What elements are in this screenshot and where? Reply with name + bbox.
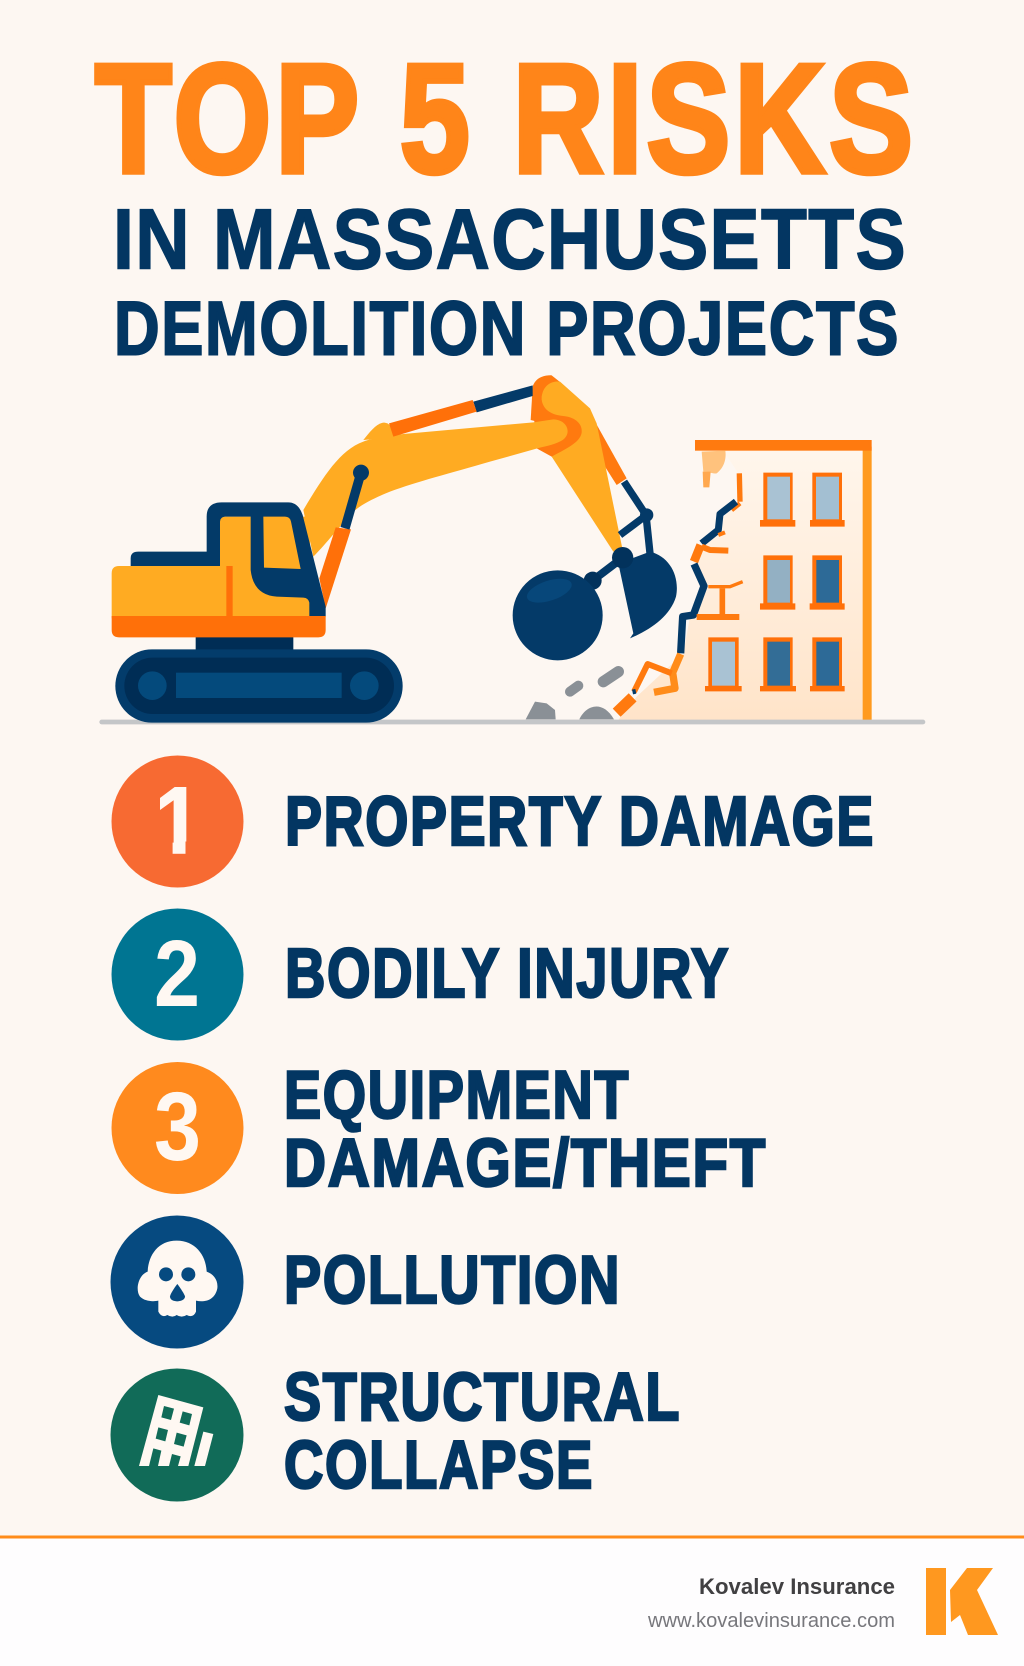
risk 5	[110, 1359, 681, 1503]
footer	[0, 1536, 1024, 1666]
lift cylinder	[319, 527, 351, 608]
risk 4	[110, 1216, 621, 1348]
building wall	[618, 451, 863, 720]
title	[95, 32, 917, 372]
risk list	[110, 756, 875, 1503]
cab and body	[112, 502, 326, 637]
bucket	[618, 552, 677, 638]
risk 3: 3	[154, 1072, 201, 1181]
title line 2: IN MASSACHUSETTS	[113, 192, 907, 288]
risk 3: DAMAGE/THEFT	[284, 1125, 767, 1201]
risk 5: COLLAPSE	[284, 1427, 594, 1503]
risk 5: STRUCTURAL	[284, 1359, 681, 1435]
risk 4: POLLUTION	[284, 1242, 621, 1318]
illustration: excavator demolishing building	[99, 375, 925, 724]
excavator	[112, 375, 677, 723]
arm linkage	[620, 482, 650, 553]
risk 1	[112, 756, 875, 888]
risk 2: BODILY INJURY	[285, 934, 730, 1012]
risk 3: EQUIPMENT	[284, 1057, 630, 1133]
footer band	[0, 1537, 1024, 1666]
icon: skull	[110, 1216, 244, 1348]
arm	[531, 375, 627, 552]
logo: K	[926, 1568, 998, 1635]
broken chunk	[702, 451, 726, 473]
rubble	[526, 672, 618, 719]
boom	[303, 419, 568, 557]
ground line	[99, 720, 925, 724]
risk 2	[112, 908, 730, 1040]
wrecking ball	[513, 547, 633, 660]
tracks	[115, 635, 403, 723]
crack edge	[617, 473, 743, 713]
brand name: Kovalev Insurance	[699, 1574, 895, 1599]
windows	[705, 473, 845, 691]
boom hump	[363, 423, 394, 440]
boom hydraulic cylinder	[473, 385, 533, 412]
roof and side wall	[863, 447, 872, 720]
icon: leaning building	[110, 1368, 244, 1502]
risk 3	[112, 1057, 767, 1201]
risk 1: PROPERTY DAMAGE	[285, 782, 875, 860]
risk 1: 1	[155, 768, 201, 874]
building	[617, 440, 872, 720]
website: www.kovalevinsurance.com	[647, 1610, 895, 1632]
risk 2: 2	[154, 921, 200, 1027]
